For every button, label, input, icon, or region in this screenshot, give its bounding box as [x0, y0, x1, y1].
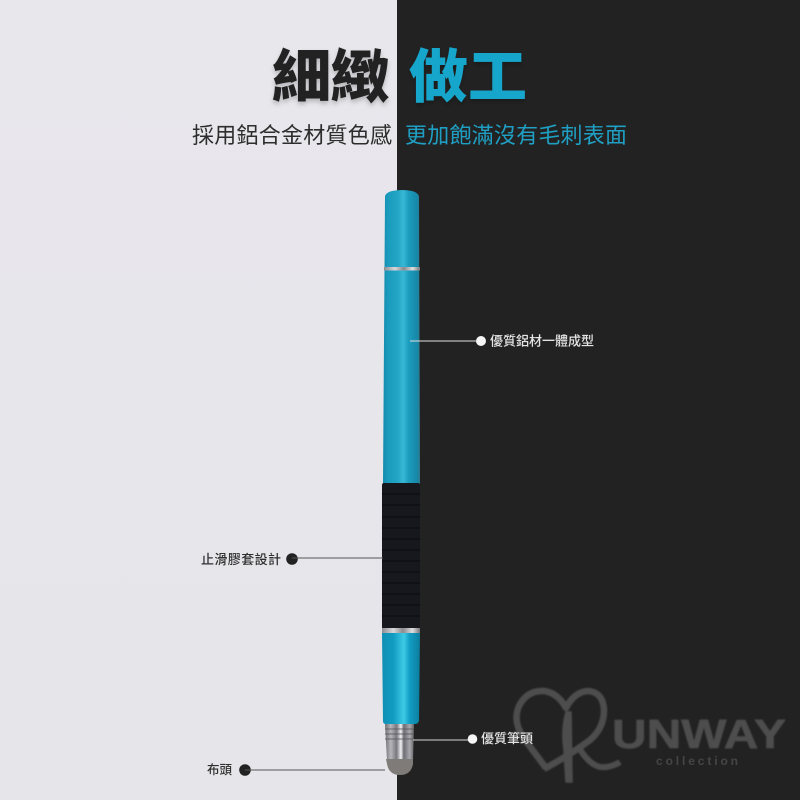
callout: aluminium body: 優質鋁材一體成型: [490, 334, 594, 348]
title: 做工: [409, 45, 527, 110]
logo heart and R: [517, 691, 620, 782]
pen lower barrel: [382, 633, 420, 724]
callout: anti-slip grip: [201, 552, 383, 567]
callout: pen tip: [413, 731, 533, 746]
background: light left panel: [0, 0, 397, 800]
watermark logo: Runway collection: [517, 691, 786, 782]
stylus pen: [382, 190, 420, 775]
subtitle: [192, 123, 627, 148]
pen metal tip: [385, 724, 414, 761]
callout: anti-slip grip: 止滑膠套設計: [201, 552, 281, 567]
callout: pen tip: 優質筆頭: [481, 731, 533, 746]
background: dark right panel: [397, 0, 800, 800]
title: [272, 45, 527, 110]
pen felt tip: [386, 759, 413, 775]
subtitle: 採用鋁合金材質色感: [192, 123, 392, 148]
pen metal ring upper: [384, 267, 420, 270]
logo tagline: collection: [656, 754, 738, 768]
logo wordmark: UNWAY: [612, 711, 786, 757]
pen metal ring lower: [382, 628, 420, 633]
pen rubber grip: [382, 483, 420, 629]
callout: aluminium body: [410, 334, 594, 348]
title: 細緻: [272, 45, 390, 110]
callout: fabric tip: 布頭: [207, 762, 232, 777]
subtitle: 更加飽滿沒有毛刺表面: [405, 123, 627, 148]
pen upper barrel: [383, 190, 420, 484]
callout: fabric tip: [207, 762, 385, 777]
